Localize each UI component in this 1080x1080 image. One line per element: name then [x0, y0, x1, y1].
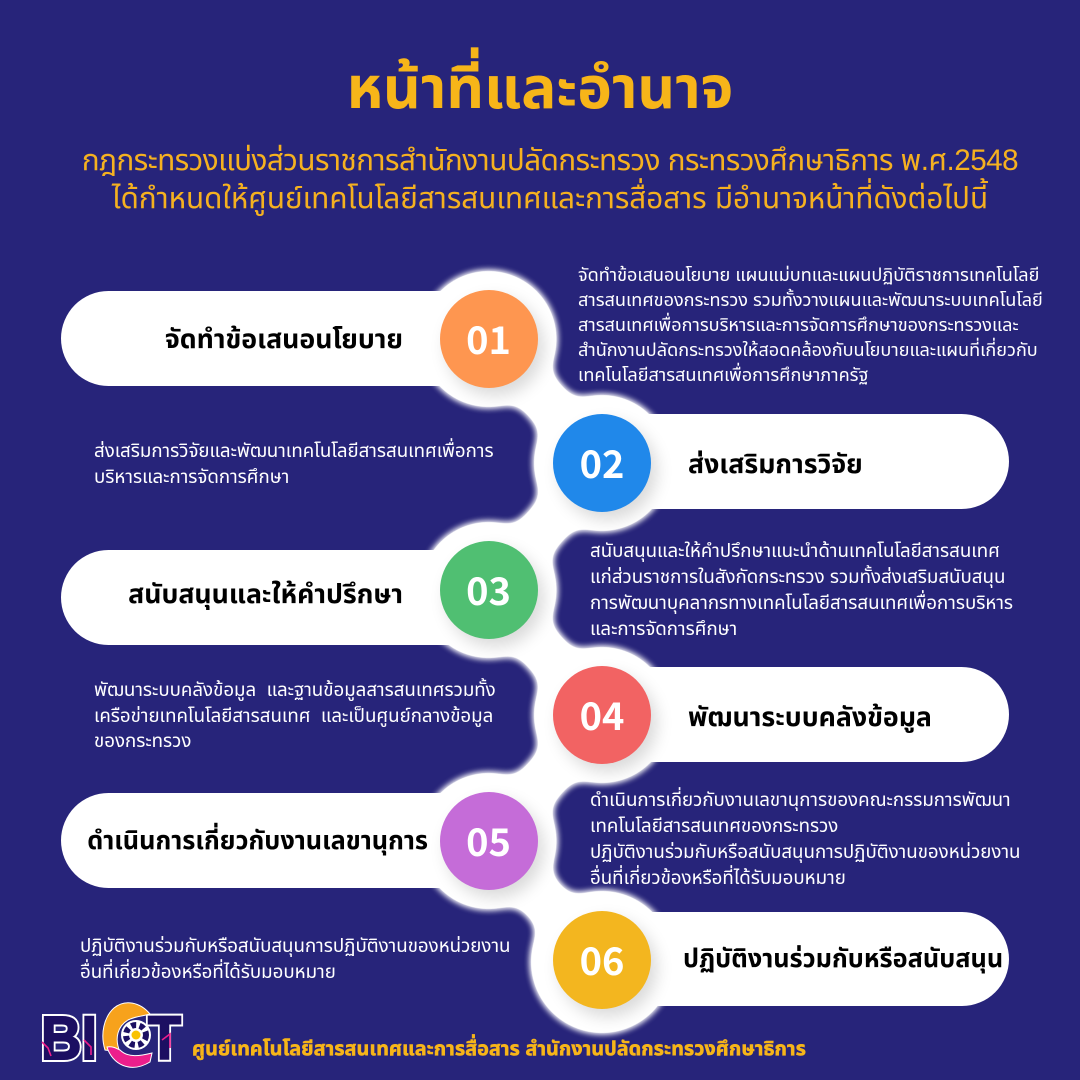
step 01 number: 01 [466, 310, 511, 365]
step 05 label: ดำเนินการเกี่ยวกับงานเลขานุการ [87, 827, 428, 855]
step 01 label: จัดทำข้อเสนอนโยบาย [165, 324, 403, 354]
step 01 description [578, 264, 1043, 384]
step 06 description [80, 935, 510, 982]
step 04 description [94, 678, 496, 751]
step 05 number [440, 792, 538, 890]
step 03 description: และการจัดการศึกษา [590, 618, 737, 639]
step 03 description: สนับสนุนและให้คำปรึกษาแนะนำด้านเทคโนโลยีสารสนเทศ [590, 540, 1000, 561]
step 06 description: ปฏิบัติงานร่วมกับหรือสนับสนุนการปฏิบัติงานของหน่วยงาน [80, 935, 510, 956]
logo: BICT [41, 1002, 184, 1072]
step 02 number [553, 414, 651, 512]
step 05 description [590, 787, 1020, 888]
step 06 number: 06 [580, 931, 624, 986]
step 04 description: ของกระทรวง [94, 730, 191, 751]
step 06 number [553, 911, 651, 1009]
step 03 description: การพัฒนาบุคลากรทางเทคโนโลยีสารสนเทศเพื่อการบริหาร [590, 592, 1013, 613]
step 03 number [440, 541, 538, 639]
step 01 description: เทคโนโลยีสารสนเทศเพื่อการศึกษาภาครัฐ [578, 364, 868, 384]
step 05 number: 05 [466, 812, 511, 867]
footer organisation name: ศูนย์เทคโนโลยีสารสนเทศและการสื่อสาร สำนักงานปลัดกระทรวงศึกษาธิการ [192, 1038, 806, 1060]
step 05 description: ดำเนินการเกี่ยวกับงานเลขานุการของคณะกรรมการพัฒนา [590, 789, 1011, 810]
logo: BICT: BI [41, 1004, 97, 1072]
step 01 description: สารสนเทศเพื่อการบริหารและการจัดการศึกษาของกระทรวงและ [578, 314, 1019, 334]
step 03 number: 03 [466, 561, 511, 616]
step 03 label: สนับสนุนและให้คำปรึกษา [128, 579, 403, 609]
step 01 description: สำนักงานปลัดกระทรวงให้สอดคล้องกับนโยบายและแผนที่เกี่ยวกับ [578, 340, 1038, 360]
subtitle: กฎกระทรวงแบ่งส่วนราชการสำนักงานปลัดกระทรวง กระทรวงศึกษาธิการ พ.ศ.2548 [82, 144, 1018, 177]
step 01 description: จัดทำข้อเสนอนโยบาย แผนแม่บทและแผนปฏิบัติราชการเทคโนโลยี [578, 264, 1039, 284]
step 02 description: บริหารและการจัดการศึกษา [94, 466, 289, 487]
step 05 description: ปฏิบัติงานร่วมกับหรือสนับสนุนการปฏิบัติงานของหน่วยงาน [590, 841, 1020, 862]
logo: BICT: T [148, 1004, 181, 1072]
step 01 description: สารสนเทศของกระทรวง รวมทั้งวางแผนและพัฒนาระบบเทคโนโลยี [578, 290, 1043, 310]
title: หน้าที่และอำนาจ [347, 56, 733, 121]
step 02 description: ส่งเสริมการวิจัยและพัฒนาเทคโนโลยีสารสนเทศเพื่อการ [94, 440, 494, 461]
step 04 label: พัฒนาระบบคลังข้อมูล [688, 702, 932, 732]
step 02 description [94, 438, 494, 487]
step 01 number [440, 290, 538, 388]
step 02 number: 02 [580, 434, 624, 489]
step 04 number [553, 666, 651, 764]
step 05 description: เทคโนโลยีสารสนเทศของกระทรวง [590, 815, 838, 836]
step 04 description: เครือข่ายเทคโนโลยีสารสนเทศ และเป็นศูนย์กลางข้อมูล [94, 704, 493, 726]
step 05 description: อื่นที่เกี่ยวข้องหรือที่ได้รับมอบหมาย [590, 867, 846, 888]
subtitle: ได้กำหนดให้ศูนย์เทคโนโลยีสารสนเทศและการสื่อสาร มีอำนาจหน้าที่ดังต่อไปนี้ [112, 182, 988, 215]
step 06 label: ปฏิบัติงานร่วมกับหรือสนับสนุน [683, 945, 1003, 973]
step 03 description: แก่ส่วนราชการในสังกัดกระทรวง รวมทั้งส่งเสริมสนับสนุน [590, 566, 1005, 587]
step 04 number: 04 [580, 686, 624, 741]
logo: BICT: T [148, 1004, 181, 1072]
subtitle [82, 144, 1018, 216]
step 03 description [590, 540, 1013, 639]
step 02 label: ส่งเสริมการวิจัย [688, 449, 863, 479]
logo: BICT: BI [41, 1004, 97, 1072]
step 06 description: อื่นที่เกี่ยวข้องหรือที่ได้รับมอบหมาย [80, 961, 336, 982]
step 04 description: พัฒนาระบบคลังข้อมูล และฐานข้อมูลสารสนเทศรวมทั้ง [94, 679, 496, 700]
